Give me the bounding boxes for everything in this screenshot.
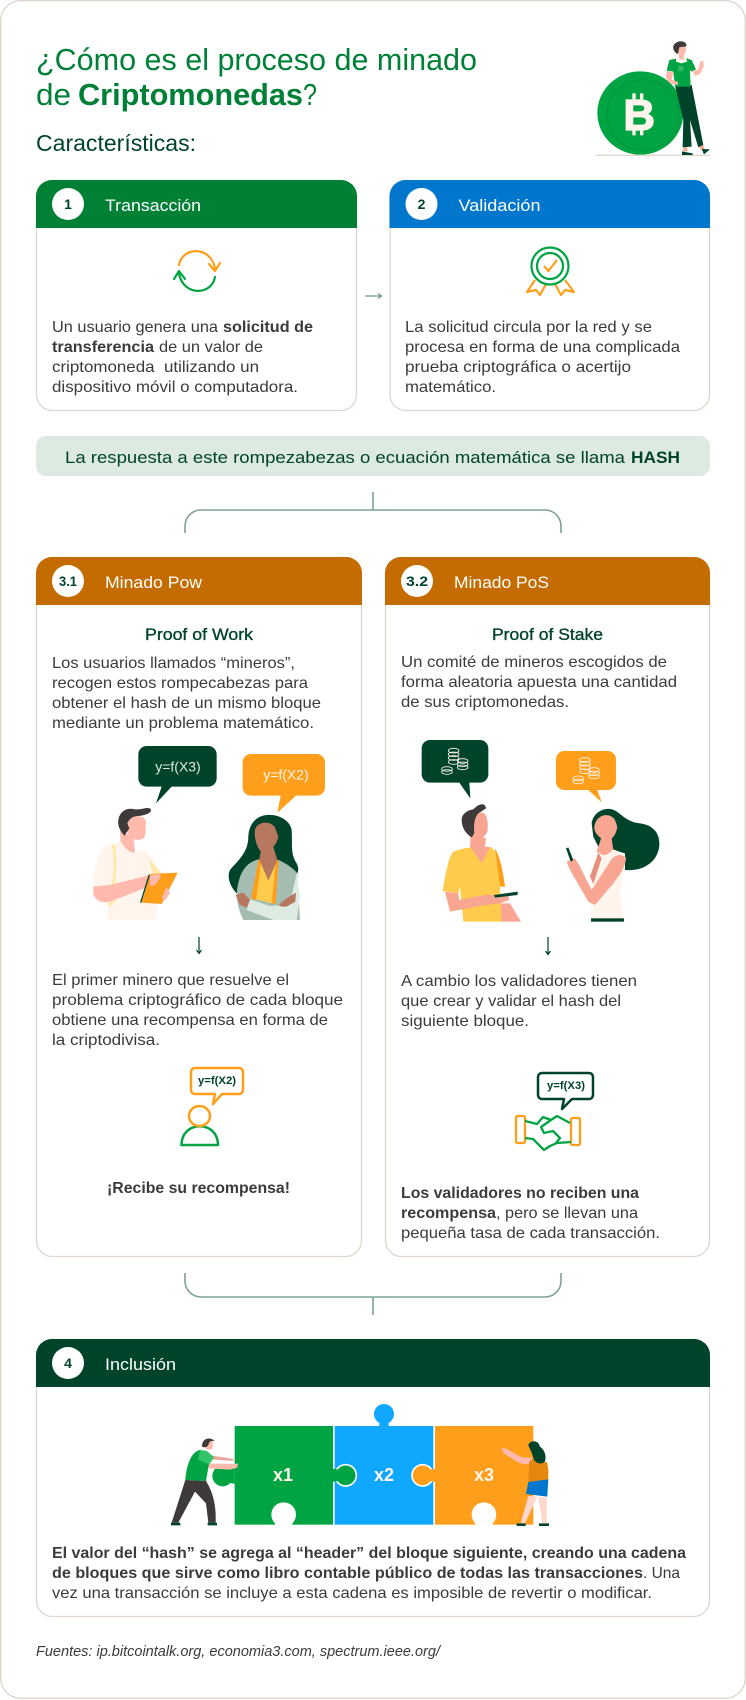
number badge 1 [52, 188, 84, 220]
text: validacion description: matemático. [405, 379, 496, 396]
illustration: puzzle pieces [171, 1404, 549, 1527]
icon: medal [527, 248, 574, 295]
illustration: puzzle pieces: x2 [374, 1465, 394, 1485]
icon: person with formula: y=f(X2) [198, 1075, 236, 1087]
text: transaccion description: criptomoneda utilizando un [52, 359, 259, 376]
text: inclusion description: de bloques que sirve como libro contable público de todas las transacciones [52, 1565, 643, 1582]
illustration: validators with coins [422, 740, 659, 922]
text: validacion description: procesa en forma de una complicada [405, 339, 680, 356]
text: validacion description: prueba criptográfica o acertijo [405, 359, 631, 376]
text: validacion description: La solicitud circula por la red y se [405, 319, 652, 336]
number badge 3.2 [401, 565, 433, 597]
icon: cycle arrows [174, 251, 220, 291]
text: pow description: recogen estos rompecabezas para [52, 675, 308, 692]
text: pos validators: que crear y validar el hash del [401, 993, 621, 1010]
illustration: puzzle pieces: x1 [273, 1465, 293, 1485]
illustration: puzzle pieces: x3 [474, 1465, 494, 1485]
text: pow description [52, 655, 321, 732]
text: recibe su recompensa: ¡Recibe su recompensa! [107, 1180, 290, 1197]
text: pow reward: la criptodivisa. [52, 1032, 160, 1049]
title: de [36, 77, 71, 112]
illustration: miners with formulas [93, 746, 325, 920]
text: transaccion description: de un valor de [159, 339, 263, 356]
subheading: proof of stake: Proof of Stake [492, 625, 603, 644]
heading: minado pos: Minado PoS [454, 573, 549, 592]
title: ¿Cómo es el proceso de minado [36, 42, 477, 77]
header: inclusion [36, 1339, 710, 1387]
heading: transaccion: Transacción [105, 196, 201, 215]
text: inclusion description: . Una [643, 1565, 680, 1582]
number badge 4: 4 [64, 1355, 72, 1371]
number badge 1: 1 [64, 196, 72, 212]
panel: step 2 validacion [390, 180, 710, 410]
number badge 4 [52, 1347, 84, 1379]
text: transaccion description: Un usuario genera una [52, 319, 218, 336]
arrow: step 1 to step 2 [365, 294, 382, 298]
connector: bottom bracket [185, 1273, 561, 1315]
text: inclusion description: vez una transacción se incluye a esta cadena es imposible de revertir o modificar. [52, 1585, 652, 1602]
title [36, 42, 477, 112]
arrow: down pow [196, 937, 202, 954]
panel: step 1 transaccion [36, 180, 357, 410]
header: validacion [390, 180, 710, 228]
heading: minado pow: Minado Pow [105, 573, 203, 592]
subheading: proof of work: Proof of Work [145, 625, 254, 644]
text: validators fee [401, 1185, 660, 1242]
icon: handshake with formula [516, 1073, 593, 1150]
number badge 3.1: 3.1 [59, 573, 77, 589]
illustration: miners with formulas: y=f(X2) [263, 766, 309, 782]
text: validators fee: recompensa [401, 1205, 496, 1222]
text: pos validators: siguiente bloque. [401, 1013, 529, 1030]
panel: 3.1 minado pow [36, 557, 362, 1256]
arrow: down pos [546, 937, 550, 954]
connector: top bracket [185, 492, 561, 533]
text: transaccion description [52, 319, 313, 396]
text: pow reward: obtiene una recompensa en forma de [52, 1012, 328, 1029]
text: pos description: Un comité de mineros escogidos de [401, 654, 667, 671]
icon: handshake with formula: y=f(X3) [547, 1080, 585, 1092]
subtitle: Características: [36, 130, 196, 156]
illustration: miners with formulas: y=f(X3) [155, 759, 201, 775]
text: validators fee: pequeña tasa de cada transacción. [401, 1225, 660, 1242]
panel: step 4 inclusion [36, 1339, 710, 1616]
text: pos description: forma aleatoria apuesta una cantidad [401, 674, 677, 691]
illustration: bitcoin coin and person [596, 41, 710, 156]
number badge 2 [406, 188, 438, 220]
text: transaccion description: dispositivo móvil o computadora. [52, 379, 298, 396]
icon: person with formula [182, 1068, 243, 1145]
title: Criptomonedas [78, 77, 303, 112]
callout: hash: La respuesta a este rompezabezas o ecuación matemática se llama [65, 448, 626, 467]
text: pos validators [401, 973, 637, 1030]
text: pos validators: A cambio los validadores tienen [401, 973, 637, 990]
text: transaccion description: solicitud de [223, 319, 313, 336]
number badge 3.2: 3.2 [406, 573, 428, 589]
heading: validacion: Validación [458, 196, 540, 215]
text: pow reward: El primer minero que resuelve el [52, 972, 289, 989]
header: minado pow [36, 557, 362, 605]
illustration: bitcoin coin and person: B [623, 91, 655, 140]
text: transaccion description: transferencia [52, 339, 154, 356]
header: transaccion [36, 180, 357, 228]
sources: Fuentes: ip.bitcointalk.org, economia3.com, spectrum.ieee.org/ [36, 1643, 442, 1660]
callout: hash [36, 436, 710, 476]
number badge 2: 2 [418, 196, 426, 212]
text: pow reward: problema criptográfico de cada bloque [52, 992, 343, 1009]
text: pow reward [52, 972, 343, 1049]
panel: 3.2 minado pos [385, 557, 710, 1256]
text: pow description: obtener el hash de un mismo bloque [52, 695, 321, 712]
title: ? [303, 77, 317, 112]
text: validators fee: Los validadores no reciben una [401, 1185, 639, 1202]
heading: inclusion: Inclusión [105, 1355, 176, 1374]
text: inclusion description [52, 1545, 686, 1602]
header: minado pos [385, 557, 710, 605]
text: pos description [401, 654, 677, 711]
text: pow description: mediante un problema matemático. [52, 715, 314, 732]
text: validators fee: , pero se llevan una [496, 1205, 638, 1222]
text: pos description: de sus criptomonedas. [401, 694, 569, 711]
text: inclusion description: El valor del “hash” se agrega al “header” del bloque siguiente, creando una cadena [52, 1545, 686, 1562]
number badge 3.1 [52, 565, 84, 597]
text: pow description: Los usuarios llamados “mineros”, [52, 655, 295, 672]
callout: hash: HASH [631, 448, 680, 467]
text: validacion description [405, 319, 680, 396]
